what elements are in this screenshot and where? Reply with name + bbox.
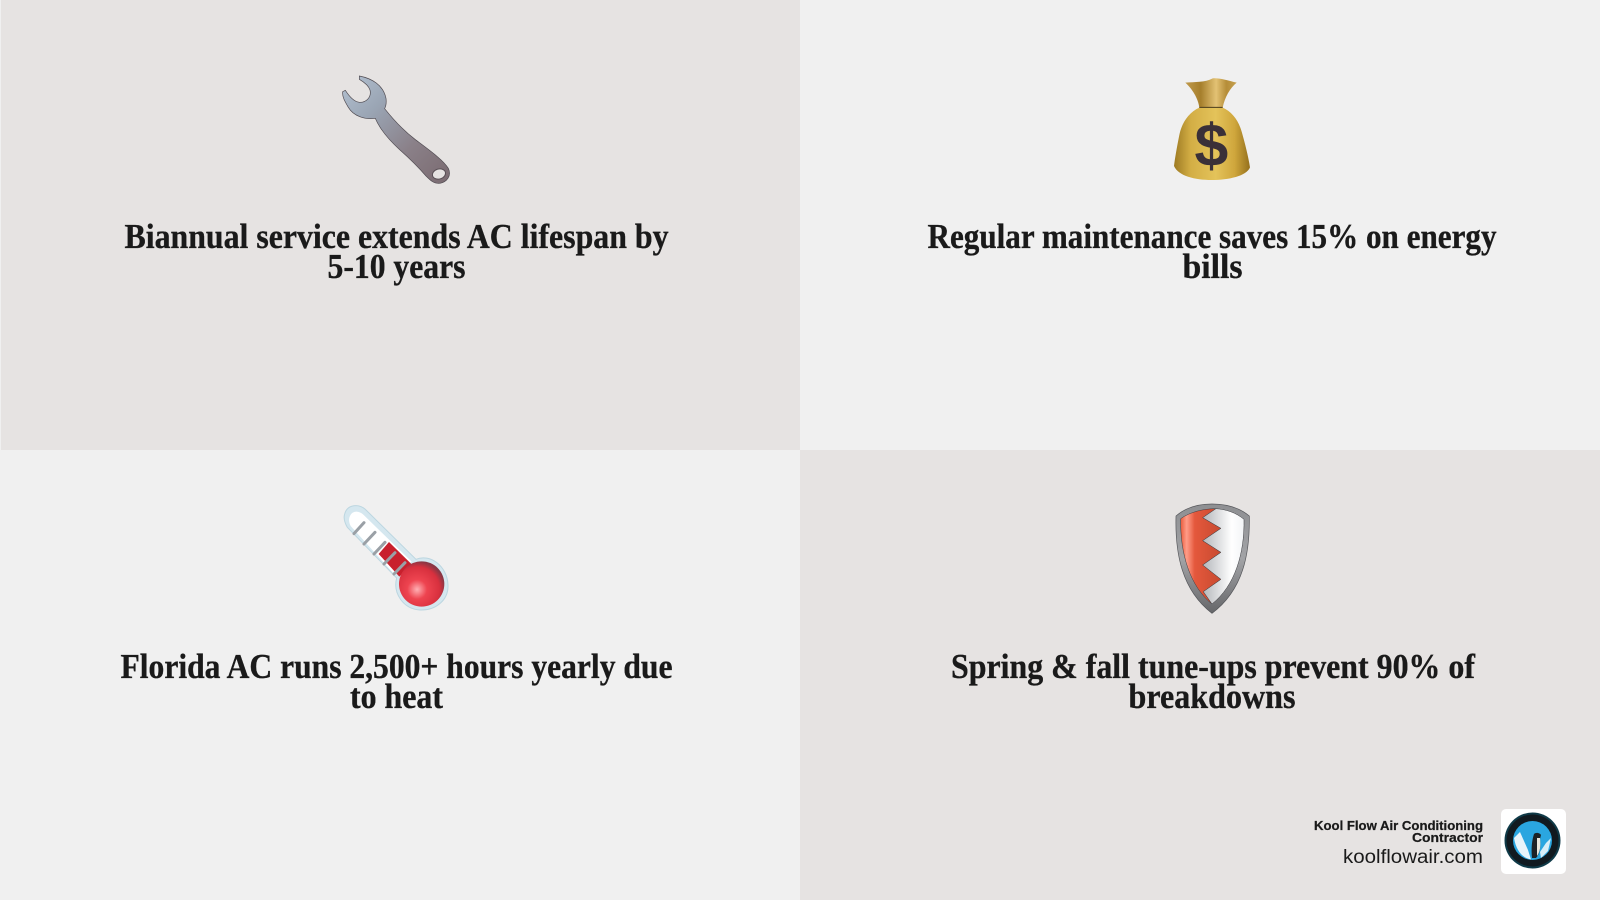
icon: money bag: [1174, 78, 1250, 180]
icon: thermometer: [344, 506, 448, 610]
heading: florida AC: Florida AC runs 2,500+ hours yearly due: [120, 647, 672, 686]
heading: florida AC: [120, 647, 672, 716]
heading: spring and fall: Spring & fall tune-ups prevent 90% of: [951, 647, 1475, 686]
panel: bottom left background: [0, 450, 800, 900]
heading: florida AC: to heat: [350, 677, 443, 716]
brand text: Kool Flow Air Conditioning: [1314, 818, 1483, 833]
heading: spring and fall: [951, 647, 1475, 716]
heading: biannual service: [124, 217, 669, 286]
heading: regular maintenance: Regular maintenance saves 15% on energy: [928, 217, 1497, 256]
heading: biannual service: Biannual service extends AC lifespan by: [124, 217, 669, 256]
icon: shield: [1176, 504, 1249, 613]
heading: regular maintenance: [928, 217, 1497, 286]
panel: top left background: [0, 0, 800, 450]
heading: spring and fall: breakdowns: [1128, 677, 1296, 716]
heading: biannual service: 5-10 years: [328, 247, 466, 286]
panel: top right background: [800, 0, 1600, 450]
brand text: [1314, 818, 1483, 868]
logo: penguin badge: [1501, 809, 1566, 874]
heading: regular maintenance: bills: [1182, 247, 1242, 286]
brand text: koolflowair.com: [1343, 847, 1483, 868]
panel: bottom right background: [800, 450, 1600, 900]
icon: wrench: [343, 76, 450, 183]
brand text: Contractor: [1412, 830, 1483, 845]
icon: money bag: $: [1194, 111, 1228, 179]
